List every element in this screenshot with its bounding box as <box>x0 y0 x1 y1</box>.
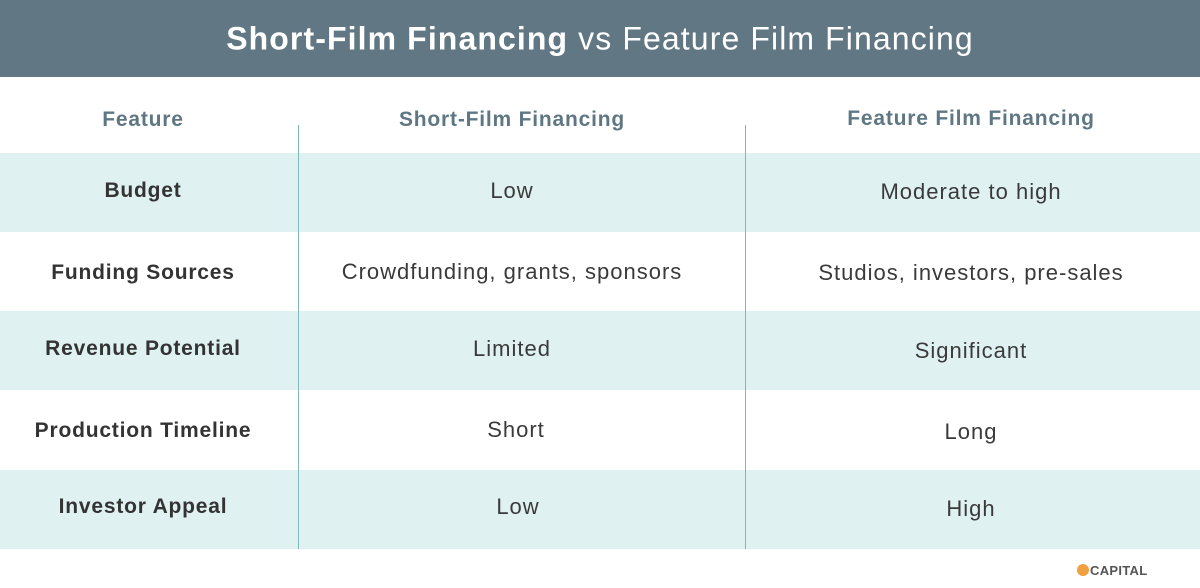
row: budget: Budget <box>104 179 182 202</box>
row: production timeline: Short <box>487 417 545 442</box>
row: budget: Low <box>490 178 534 203</box>
row: funding sources: Funding Sources <box>51 261 235 284</box>
title bar <box>0 0 1200 77</box>
row band: investor appeal <box>0 470 1200 549</box>
title: Short-Film Financing vs Feature Film Financing <box>226 20 974 56</box>
header row: Short-Film Financing <box>399 108 625 131</box>
row: production timeline: Long <box>945 419 997 444</box>
row: budget: Moderate to high <box>880 179 1062 204</box>
row: funding sources: Crowdfunding, grants, sponsors <box>342 259 682 284</box>
row: investor appeal <box>59 494 996 521</box>
row band: budget <box>0 153 1200 232</box>
row: budget <box>104 178 1062 204</box>
row: investor appeal: High <box>946 496 996 521</box>
row: production timeline: Production Timeline <box>35 419 251 442</box>
row: revenue potential: Limited <box>473 336 551 361</box>
header row: Feature Film Financing <box>847 107 1095 130</box>
row: revenue potential <box>45 336 1027 363</box>
header row: Feature <box>102 108 184 131</box>
row: funding sources <box>51 259 1124 285</box>
row: revenue potential: Revenue Potential <box>45 337 241 360</box>
row: investor appeal: Low <box>496 494 540 519</box>
row: production timeline <box>35 417 997 444</box>
row: revenue potential: Significant <box>915 338 1027 363</box>
row: investor appeal: Investor Appeal <box>59 495 227 518</box>
row: funding sources: Studios, investors, pre-sales <box>818 260 1124 285</box>
logo: eCapital: CAPITAL <box>1090 563 1147 578</box>
row band: revenue <box>0 311 1200 390</box>
header row <box>102 107 1095 131</box>
